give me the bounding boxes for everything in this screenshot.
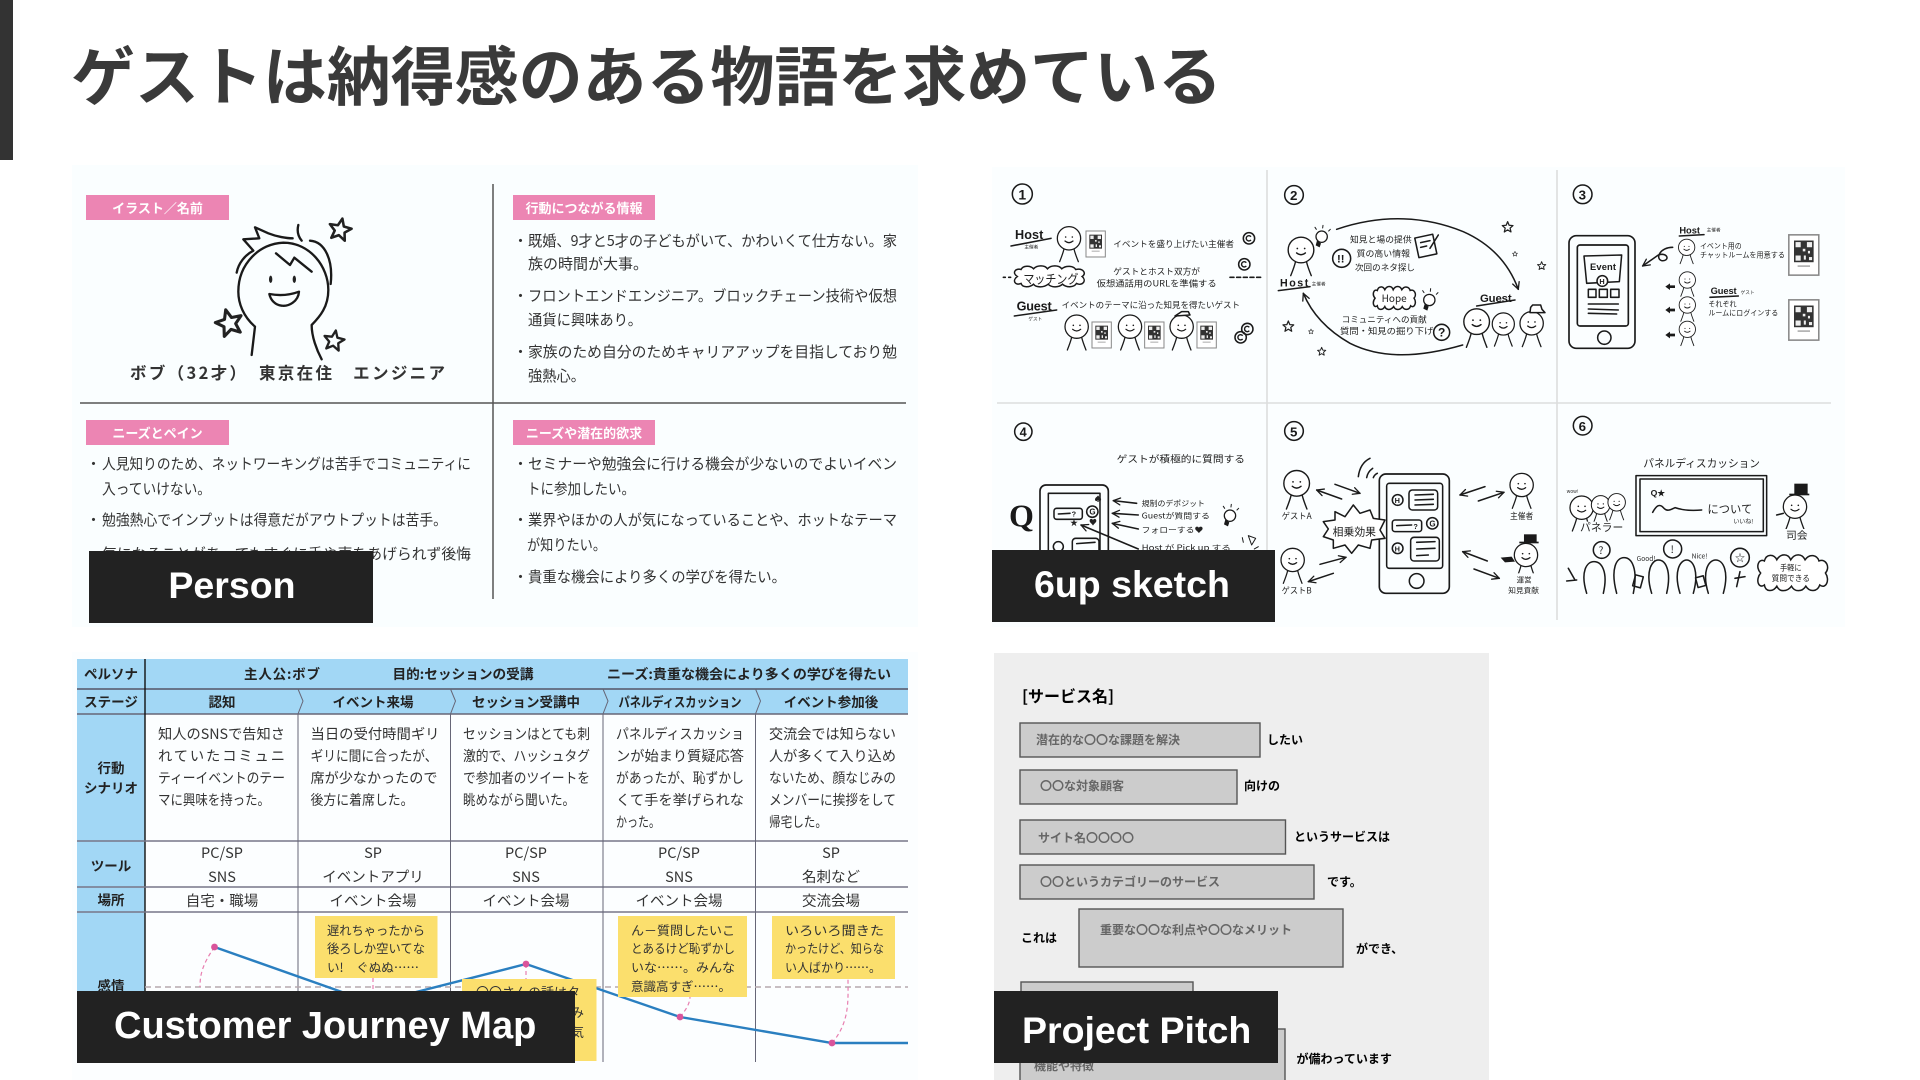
pitch row: problem: したい: [1267, 731, 1303, 748]
sketch 4: guests ask questions: ★: [1070, 518, 1078, 529]
text: actionable information: [513, 230, 897, 386]
sketch 1: matching: 主催者: [1024, 244, 1039, 251]
scenario row: れていたコミュニ: [158, 745, 285, 766]
text: needs and latent desires: ・: [513, 453, 528, 474]
sticky note: stage 4: [618, 916, 747, 997]
text: needs and pains: 入っていけない。: [102, 478, 211, 499]
sketch 1: matching: Host: [1015, 228, 1044, 242]
sketch 5: synergy: G: [1429, 519, 1436, 528]
sketch 4: guests ask questions: 4: [1020, 425, 1027, 439]
sticky note: stage 3: 〇〇さんの話はタ: [476, 982, 580, 1001]
sketch 4: guests ask questions: Q: [1009, 498, 1034, 534]
tag: illustration and name: [86, 195, 229, 220]
sticky note: stage 3: メになるし楽しみ: [476, 1002, 584, 1021]
scenario row: 知人のSNSで告知さ: [158, 723, 285, 744]
text: actionable information: 族の時間が大事。: [528, 253, 648, 274]
icon: smiling persona with stars: [213, 216, 353, 359]
text: actionable information: ・: [513, 230, 528, 251]
sketch 6: panel discussion: Nice!: [1692, 550, 1707, 560]
sticky note: stage 2: [315, 916, 438, 978]
label: 6up sketch: 6up sketch: [1034, 563, 1230, 605]
pitch row: category: 〇〇というカテゴリーのサービス: [1040, 873, 1220, 890]
tools row: イベントアプリ: [322, 866, 424, 887]
stage row: 認知: [208, 691, 236, 711]
text: needs and pains: ・: [86, 453, 101, 474]
pitch row: target customer: 向けの: [1244, 777, 1280, 794]
scenario row: ギリに間に合ったが、: [310, 745, 438, 766]
tools row: SP: [364, 842, 382, 863]
label: Person: [89, 551, 373, 623]
sketch 6: panel discussion: [1567, 416, 1828, 593]
sketch 3: join chat room: ルームにログインする: [1708, 308, 1778, 319]
stage row: セッション受講中: [472, 691, 580, 711]
sticky note: stage 5: い人ばかり……。: [785, 958, 881, 976]
sketch 6: panel discussion: について: [1707, 501, 1752, 517]
sketch 6: panel discussion: パネラー: [1580, 520, 1623, 535]
sketch 4: guests ask questions: [1009, 423, 1258, 585]
pitch row: benefit: [1021, 909, 1403, 967]
stage row: イベント来場: [332, 691, 414, 711]
tools row: SP: [822, 842, 840, 863]
row labels: ステージ: [84, 691, 138, 711]
sketch 2: host and guest exchange: 主催者: [1312, 280, 1326, 287]
scenario row: 交流会では知らない: [769, 723, 896, 744]
scenario row: 人が多くて入り込め: [769, 745, 896, 766]
scenario row: 帰宅した。: [769, 811, 827, 832]
text: needs and latent desires: ・: [513, 566, 528, 587]
sticky note: stage 3: だ。会場の雰囲気: [476, 1022, 584, 1041]
sticky note: stage 4: 意識高すぎ……。: [631, 977, 731, 995]
scenario row: メンバーに挨拶をして: [769, 789, 896, 810]
sketch 2: host and guest exchange: 知見と場の提供: [1350, 234, 1412, 246]
sketch 6: panel discussion: いいね!: [1733, 517, 1753, 526]
sketch 3: join chat room: チャットルームを用意する: [1700, 249, 1785, 260]
sketch 3: join chat room: 主催者: [1707, 226, 1721, 233]
sticky note: stage 5: [772, 916, 895, 979]
pitch row: target customer: 〇〇な対象顧客: [1040, 777, 1124, 794]
sketch 3: join chat room: イベント用の: [1700, 241, 1742, 252]
tools row: SNS: [512, 866, 540, 887]
sketch 4: guests ask questions: Guestが質問する: [1142, 510, 1210, 521]
sketch 6: panel discussion: 司会: [1786, 527, 1808, 542]
panel: 6up sketch: [992, 167, 1845, 627]
pitch row: benefit: ができ、: [1356, 940, 1403, 957]
scenario row: パネルディスカッショ: [616, 723, 744, 744]
scenario row: マに興味を持った。: [158, 789, 270, 810]
sketch 5: synergy: H: [1395, 496, 1400, 505]
table header band: [77, 659, 908, 1062]
text: needs and pains: ・: [86, 543, 101, 564]
sketch 2: host and guest exchange: ?: [1438, 326, 1445, 340]
scenario row: ティーイベントのテー: [158, 767, 285, 788]
pitch row: category: [1020, 865, 1362, 899]
pitch row: service name: サイト名〇〇〇〇: [1038, 829, 1134, 846]
sketch 4: guests ask questions: 規制のデポジット: [1142, 498, 1205, 509]
label: Person: Person: [168, 564, 296, 606]
sketch 6: panel discussion: !: [1671, 541, 1674, 556]
pitch row: target customer: [1020, 770, 1280, 804]
scenario row: かった。: [616, 811, 660, 832]
text: needs and latent desires: が知りたい。: [527, 534, 606, 555]
sketch 5: synergy: 知見貢献: [1508, 585, 1540, 596]
sketch 6: panel discussion: 6: [1579, 419, 1586, 434]
sketch 2: host and guest exchange: 次回のネタ探し: [1355, 262, 1415, 274]
scenario row: 当日の受付時間ギリ: [310, 723, 440, 744]
sketch 3: join chat room: [1569, 185, 1819, 348]
place row: 自宅・職場: [186, 890, 258, 911]
tools row: SNS: [208, 866, 236, 887]
scenario row: セッションはとても刺: [463, 723, 590, 744]
sketch 5: synergy: ゲストA: [1282, 510, 1313, 522]
text: actionable information: 通貨に興味あり。: [528, 309, 642, 330]
sketch 4: guests ask questions: フォローする♥: [1142, 524, 1204, 535]
sketch 6: panel discussion: 質問できる: [1772, 573, 1810, 584]
text: needs and latent desires: 業界やほかの人が気になっていることや、ホットなテーマ: [528, 509, 897, 530]
sketch 6: panel discussion: wow!: [1567, 489, 1579, 495]
sketch 6: panel discussion: Good!: [1637, 553, 1656, 563]
sketch 2: host and guest exchange: 2: [1290, 188, 1297, 203]
tools row: [201, 842, 860, 887]
scenario row: があったが、恥ずかし: [616, 767, 744, 788]
text: needs and pains: 気になることがあってもすぐに手や声をあげられず後悔: [102, 543, 471, 564]
tag: needs and pains: ニーズとペイン: [112, 423, 203, 442]
scenario row: で参加者のツイートを: [463, 767, 590, 788]
sketch 4: guests ask questions: G: [1089, 508, 1096, 517]
sticky note: stage 4: ん－質問したいこ: [631, 921, 735, 939]
text: needs and pains: 人見知りのため、ネットワーキングは苦手でコミュニティに: [102, 453, 471, 474]
sticky note: stage 3: [462, 979, 596, 1061]
persona row: [244, 663, 891, 683]
sketch 5: synergy: ?: [1413, 522, 1418, 531]
title: ゲストは納得感のある物語を求めている: [71, 27, 1222, 119]
sketch 2: host and guest exchange: Host: [1280, 278, 1309, 290]
sketch 3: join chat room: Host: [1679, 225, 1700, 235]
place row: イベント会場: [636, 890, 722, 911]
sketch 6: panel discussion: 手軽に: [1780, 563, 1802, 574]
tools row: PC/SP: [505, 842, 547, 863]
sketch 2: host and guest exchange: コミュニティへの貢献: [1342, 314, 1427, 326]
emotion chart: [145, 944, 908, 1046]
sticky note: stage 4: いな……。みんな: [631, 958, 735, 976]
sketch 4: guests ask questions: Host が Pick up する: [1142, 543, 1231, 554]
pitch row: category: です。: [1327, 873, 1362, 890]
row labels: [84, 663, 138, 995]
pitch heading: [サービス名]: [1022, 683, 1114, 707]
text: needs and pains: 勉強熱心でインプットは得意だがアウトプットは苦手。: [102, 509, 447, 530]
text: actionable information: 既婚、9才と5才の子どもがいて、かわいくて仕方ない。家: [528, 230, 897, 251]
text: actionable information: 家族のため自分のためキャリアアップを目指しており勉: [528, 341, 897, 362]
sketch 1: matching: Guest: [1017, 300, 1052, 314]
pitch row: service name: [1020, 820, 1390, 854]
persona row: 主人公:ボブ: [244, 663, 320, 683]
scenario row: 激的で、ハッシュタグ: [463, 745, 590, 766]
sketch 1: matching: [1003, 184, 1262, 350]
caption: persona name: ボブ（32才） 東京在住 エンジニア: [130, 360, 445, 384]
text: actionable information: 強熱心。: [528, 365, 585, 386]
sketch 5: synergy: ゲストB: [1282, 585, 1312, 597]
pitch row: service name: というサービスは: [1294, 828, 1390, 845]
sketch 6: panel discussion: ?: [1599, 542, 1604, 557]
tools row: 名刺など: [802, 866, 860, 887]
row labels: 場所: [98, 889, 125, 909]
sketch 3: join chat room: ゲスト: [1741, 289, 1755, 296]
pitch row: features: [1020, 1029, 1392, 1080]
row labels: 行動: [98, 757, 124, 777]
scenario row: ないため、顔なじみの: [769, 767, 896, 788]
sketch 5: synergy: H: [1395, 544, 1400, 553]
stage row: イベント参加後: [784, 691, 879, 711]
tools row: PC/SP: [201, 842, 243, 863]
panel: customer journey map: [72, 652, 918, 1080]
pitch row: hidden box: [1021, 982, 1193, 1022]
label: 6up sketch: [992, 550, 1275, 622]
sketch 3: join chat room: 3: [1579, 188, 1586, 203]
text: needs and latent desires: 貴重な機会により多くの学びを得たい。: [528, 566, 786, 587]
panel: person: [72, 165, 918, 627]
persona row: ニーズ:貴重な機会により多くの学びを得たい: [607, 663, 891, 683]
stage row: パネルディスカッション: [618, 691, 742, 711]
accent bar: [0, 0, 13, 160]
sketch 6: panel discussion: パネルディスカッション: [1643, 456, 1760, 471]
sketch 1: matching: ゲスト: [1028, 316, 1042, 323]
row labels: シナリオ: [84, 777, 138, 797]
panel: project pitch: [994, 653, 1489, 1080]
sketch 1: matching: ゲストとホスト双方が: [1113, 266, 1201, 278]
sketch 1: matching: 1: [1018, 186, 1026, 202]
tag: needs and latent desires: ニーズや潜在的欲求: [526, 423, 642, 442]
scenario row: 眺めながら聞いた。: [463, 789, 575, 810]
sticky note: stage 4: とあるけど恥ずかし: [631, 939, 735, 957]
pitch row: problem: [1020, 723, 1303, 757]
text: needs and latent desires: ・: [513, 509, 528, 530]
sketch 2: host and guest exchange: Guest: [1480, 293, 1512, 305]
pitch row: problem: 潜在的な〇〇な課題を解決: [1036, 731, 1180, 748]
scenario row: 後方に着席した。: [310, 789, 414, 810]
row labels: ペルソナ: [84, 663, 138, 683]
sketch 5: synergy: 主催者: [1510, 510, 1533, 522]
tag: actionable information: 行動につながる情報: [525, 198, 643, 217]
sketch 3: join chat room: Guest: [1711, 286, 1737, 296]
scenario row: 席が少なかったので: [310, 767, 438, 788]
pitch row: benefit: 重要な〇〇な利点や〇〇なメリット: [1100, 921, 1292, 938]
sketch 2: host and guest exchange: [1278, 186, 1546, 355]
sketch 1: matching: マッチング: [1023, 268, 1079, 287]
row labels: ツール: [91, 855, 132, 875]
label: Customer Journey Map: [77, 991, 575, 1063]
sketch 4: guests ask questions: ?: [1072, 510, 1077, 519]
pitch row: features: 機能や特徴: [1034, 1057, 1094, 1074]
sketch 5: synergy: 運営: [1517, 574, 1532, 585]
sketch 3: join chat room: H: [1599, 277, 1605, 286]
tools row: PC/SP: [658, 842, 700, 863]
sketch 4: guests ask questions: ゲストが積極的に質問する: [1117, 451, 1245, 465]
text: needs and latent desires: トに参加したい。: [527, 478, 635, 499]
sketch 2: host and guest exchange: 質の高い情報: [1357, 248, 1411, 260]
sketch 1: matching: イベントのテーマに沿った知見を得たいゲスト: [1062, 299, 1240, 311]
text: needs and latent desires: [513, 453, 897, 587]
sketch 4: guests ask questions: ♠: [1094, 494, 1102, 505]
sketch 6: panel discussion: Q★: [1651, 488, 1666, 498]
sticky note: stage 2: 遅れちゃったから: [327, 921, 425, 939]
sketch 2: host and guest exchange: Hope: [1382, 290, 1407, 305]
label: Project Pitch: [994, 991, 1278, 1063]
tag: needs and pains: [86, 420, 229, 445]
sticky note: stage 5: いろいろ聞きた: [785, 921, 884, 939]
sticky note: stage 2: 後ろしか空いてな: [327, 939, 425, 957]
tools row: SNS: [665, 866, 693, 887]
tag: actionable information: [513, 195, 655, 220]
tag: needs and latent desires: [513, 420, 655, 445]
stage row: [208, 691, 879, 711]
row labels: 感情: [98, 975, 125, 995]
sketch 3: join chat room: Event: [1590, 262, 1616, 272]
sticky note: stage 2: い! ぐぬぬ……: [327, 958, 419, 976]
label: Customer Journey Map: Customer Journey Map: [114, 1005, 536, 1047]
sketch 3: join chat room: それぞれ: [1708, 299, 1737, 310]
sketch 1: matching: 仮想通話用のURLを準備する: [1097, 278, 1217, 290]
text: needs and pains: ・: [86, 509, 101, 530]
sketch 2: host and guest exchange: !!: [1337, 254, 1345, 266]
label: Project Pitch: Project Pitch: [1022, 1009, 1251, 1051]
pitch row: benefit: これは: [1021, 929, 1057, 946]
place row: [186, 890, 860, 911]
text: needs and pains: [86, 453, 471, 564]
place row: イベント会場: [330, 890, 416, 911]
text: actionable information: ・: [513, 285, 528, 306]
sketch 5: synergy: 相乗効果: [1333, 525, 1376, 540]
sketch 5: synergy: [1281, 422, 1540, 597]
text: needs and latent desires: セミナーや勉強会に行ける機会が少ないのでよいイベン: [528, 453, 897, 474]
sketch 6: panel discussion: ☆: [1735, 550, 1745, 565]
tag: illustration and name: イラスト／名前: [112, 198, 203, 217]
text: actionable information: ・: [513, 341, 528, 362]
place row: 交流会場: [802, 890, 860, 911]
text: actionable information: フロントエンドエンジニア。ブロックチェーン技術や仮想: [528, 285, 897, 306]
sketch 4: guests ask questions: ♥: [1089, 517, 1097, 528]
place row: イベント会場: [482, 890, 570, 911]
pitch row: features: が備わっています: [1296, 1050, 1392, 1067]
sticky note: stage 5: かったけど、知らな: [785, 939, 884, 957]
sketch 5: synergy: 5: [1290, 424, 1298, 439]
scenario row: [158, 723, 896, 832]
sketch 2: host and guest exchange: 質問・知見の掘り下げ: [1340, 325, 1434, 337]
sketch 1: matching: イベントを盛り上げたい主催者: [1113, 238, 1234, 250]
scenario row: くて手を挙げられな: [616, 789, 744, 810]
persona row: 目的:セッションの受講: [392, 663, 534, 683]
scenario row: ンが始まり質疑応答: [616, 745, 744, 766]
